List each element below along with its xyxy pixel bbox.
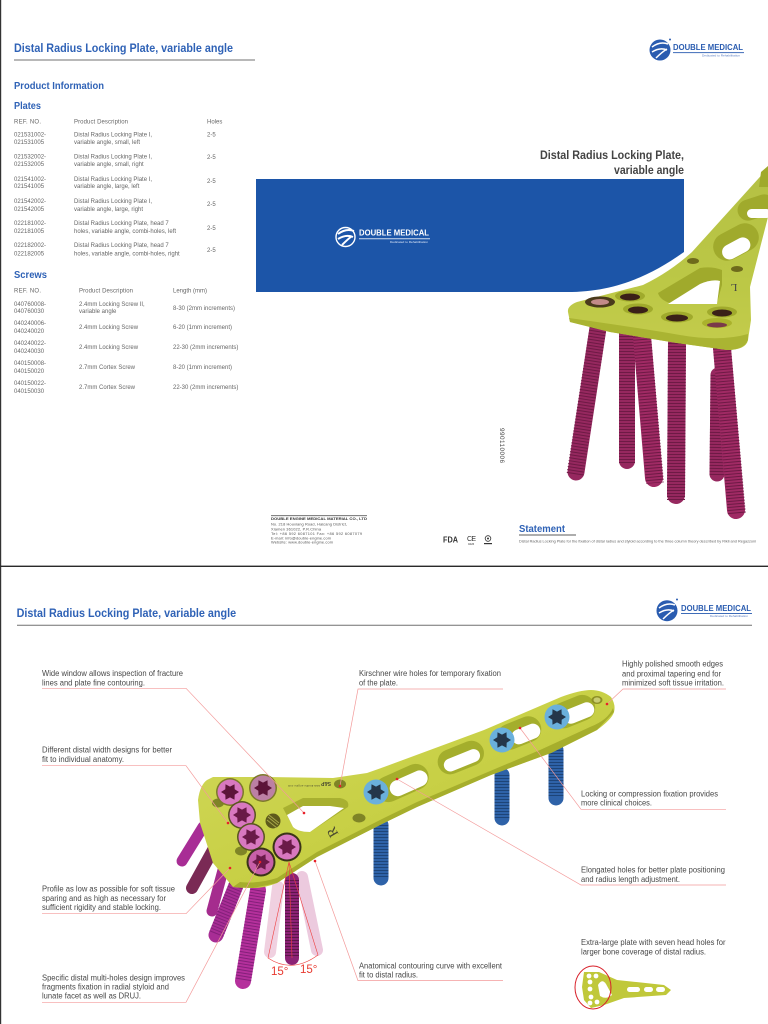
logo: page 2: DOUBLE MEDICAL [681, 603, 751, 613]
callout: locking or compression [519, 727, 726, 809]
table: plates: holes, variable angle, combi-holes, left [74, 229, 176, 235]
table: plates: 021541005 [14, 184, 45, 190]
table: screws: 2.4mm Locking Screw [79, 325, 139, 331]
certification marks: CE [467, 536, 476, 543]
callout: polished edges: and proximal tapering end for [622, 669, 721, 678]
company address block: DOUBLE ENGINE MEDICAL MATERIAL CO., LTD [271, 516, 367, 521]
table: plates: 2-5 [207, 179, 216, 185]
table: screws: 040240022- [14, 341, 46, 347]
table: plates: variable angle, small, right [74, 162, 144, 168]
plate holes: cover: L [730, 281, 737, 293]
plate engraving: S&P [320, 780, 331, 786]
logo: page 2 [656, 598, 752, 621]
angle markers: 15 degrees [268, 862, 318, 978]
callout: multi-holes design [42, 861, 261, 1002]
logo: cover white [336, 228, 430, 246]
plate body [198, 690, 615, 888]
table: screws: 040150008- [14, 361, 46, 367]
product code: vertical: 990110006 [498, 428, 505, 463]
table: screws: Product Description [79, 289, 133, 295]
callout: wide window [42, 669, 305, 814]
screws: faded angle positions [270, 877, 317, 952]
plate engraving: www.double-engine.com [288, 784, 320, 787]
table: plates: holes, variable angle, combi-holes, right [74, 252, 180, 258]
heading: plates: Plates [14, 101, 41, 112]
statement: Statement [519, 524, 566, 535]
cover heading: Distal Radius Locking Plate, [540, 148, 684, 162]
table: screws: 2.7mm Cortex Screw [79, 365, 136, 371]
table: screws: Length (mm) [173, 289, 207, 295]
table: screws: 8-30 (2mm increments) [173, 306, 235, 312]
table: screws: 040760030 [14, 309, 45, 315]
table: screws: 2.4mm Locking Screw [79, 345, 139, 351]
table: screws: 2.7mm Cortex Screw [79, 385, 136, 391]
heading: screws: Screws [14, 270, 47, 281]
table: screws: 040240020 [14, 329, 45, 335]
table: plates: 021542002- [14, 199, 46, 205]
table: plates: Distal Radius Locking Plate, head 7 [74, 221, 169, 227]
plate holes [212, 691, 602, 856]
callout: anatomical contouring: fit to distal radius. [359, 970, 418, 979]
screws: cover [575, 328, 737, 515]
logo: page 1 top [650, 38, 744, 60]
angle markers: 15 degrees: 15° [300, 964, 317, 976]
certification marks [443, 535, 492, 546]
logo: cover white: DOUBLE MEDICAL [359, 228, 429, 238]
statement [519, 524, 756, 543]
screws: pink [182, 827, 292, 981]
certification marks: FDA [443, 535, 458, 544]
logo: cover white: Dedicated to Rehabilitation [390, 240, 428, 244]
callout: anatomical contouring: Anatomical contouring curve with excellent [359, 961, 503, 970]
table: plates: 022181002- [14, 221, 46, 227]
callout: kirschner wire holes [339, 669, 503, 787]
callout: wide window: lines and plate fine contouring. [42, 678, 145, 687]
table: screws: 040240030 [14, 349, 45, 355]
cover heading: variable angle [614, 163, 684, 177]
callout: elongated holes: Elongated holes for better plate positioning [581, 866, 725, 875]
callout: multi-holes design: Specific distal multi-holes design improves [42, 973, 185, 982]
callout: kirschner wire holes: Kirschner wire holes for temporary fixation [359, 669, 501, 678]
screws: blue [381, 750, 556, 878]
callout: polished edges: minimized soft tissue irritation. [622, 679, 724, 688]
plate engraving: R [324, 823, 342, 840]
table: plates: 021531002- [14, 132, 46, 138]
callout: locking or compression: Locking or compression fixation provides [581, 789, 718, 798]
callout: low profile: sufficient rigidity and stable locking. [42, 903, 161, 912]
table: screws: 040150020 [14, 369, 45, 375]
illustration: annotated plate with screws [182, 690, 615, 981]
table: screws: 040150022- [14, 381, 46, 387]
callout: wide window: Wide window allows inspection of fracture [42, 669, 184, 678]
table: screws: 8-20 (1mm increment) [173, 365, 232, 371]
table: plates: 022181005 [14, 229, 45, 235]
callout: extra-large plate: Extra-large plate with seven head holes for [581, 938, 726, 947]
callout: distal width [42, 746, 229, 824]
table: plates: Holes [207, 120, 222, 126]
callout: anatomical contouring [314, 860, 503, 981]
company address block: Tel: +86 592 6087101 Fax: +86 592 6087079 [271, 531, 362, 536]
company address block: No. 218 Houxiang Road, Haicang District, [271, 522, 347, 527]
table: screws: REF. NO. [14, 289, 41, 295]
table: plates: 2-5 [207, 248, 216, 254]
heading: product information: Product Information [14, 81, 104, 92]
company address block: Xiamen 361022, P.R.China [271, 526, 322, 531]
table: plates: Distal Radius Locking Plate I, [74, 132, 152, 138]
callout: polished edges: Highly polished smooth edges [622, 659, 723, 668]
company address block: E-mail: info@double-engine.com [271, 535, 331, 540]
table: screws: 22-30 (2mm increments) [173, 345, 238, 351]
table: plates: 021532005 [14, 162, 45, 168]
table: screws: variable angle [79, 309, 117, 315]
cover heading [540, 148, 684, 177]
table: screws: 040760008- [14, 302, 46, 308]
table: plates: 2-5 [207, 202, 216, 208]
table: plates: Distal Radius Locking Plate I, [74, 177, 152, 183]
callout: locking or compression: more clinical choices. [581, 798, 652, 807]
table: plates: 2-5 [207, 132, 216, 138]
callout: extra-large plate: larger bone coverage of distal radius. [581, 947, 706, 956]
certification marks: 0426 [468, 542, 475, 546]
callout: multi-holes design: lunate facet as well as DRUJ. [42, 991, 141, 1000]
logo: page 1 top: Dedicated to Rehabilitation [702, 54, 740, 58]
table: plates: 2-5 [207, 226, 216, 232]
callout: kirschner wire holes: of the plate. [359, 678, 398, 687]
plate window [283, 798, 348, 832]
table: plates: 021532002- [14, 155, 46, 161]
illustration: extra-large plate thumbnail [575, 966, 671, 1009]
callout: distal width: fit to individual anatomy. [42, 755, 124, 764]
table: plates: REF. NO. [14, 120, 41, 126]
table: screws: 22-30 (2mm increments) [173, 385, 238, 391]
callout: extra-large plate [581, 938, 726, 956]
table: plates: Distal Radius Locking Plate I, [74, 199, 152, 205]
screw heads: blue [364, 704, 570, 804]
table: screws: 040240006- [14, 321, 46, 327]
logo: page 2: Dedicated to Rehabilitation [710, 614, 748, 618]
title: page 2: Distal Radius Locking Plate, variable angle [17, 606, 236, 620]
callout: low profile: sparing and as high as necessary for [42, 894, 166, 903]
table: plates: 021541002- [14, 177, 46, 183]
title: page 1: Distal Radius Locking Plate, variable angle [14, 41, 233, 55]
screw heads: pink [216, 774, 302, 876]
table: plates: variable angle, large, right [74, 207, 143, 213]
statement: Distal Radius Locking Plate for the fixation of distal radius and styloid according to the three column theory described by Rikli and Regazzoni [519, 539, 756, 543]
table: plates: Distal Radius Locking Plate I, [74, 155, 152, 161]
callout: elongated holes [396, 778, 726, 885]
company address block [271, 515, 367, 545]
table: plates: Distal Radius Locking Plate, head 7 [74, 243, 169, 249]
table: plates: variable angle, small, left [74, 140, 140, 146]
table: screws [14, 289, 238, 395]
table: plates: 022182005 [14, 252, 45, 258]
callout: distal width: Different distal width designs for better [42, 746, 172, 755]
plate body: cover [568, 168, 768, 350]
plate engraving [288, 780, 342, 840]
table: plates: 021542005 [14, 207, 45, 213]
company address block: Website: www.double-engine.com [271, 540, 333, 545]
table: screws: 040150030 [14, 389, 45, 395]
table: screws: 6-20 (1mm increment) [173, 325, 232, 331]
table: plates [14, 120, 222, 258]
logo: page 1 top: DOUBLE MEDICAL [673, 42, 743, 52]
plate holes: cover [585, 166, 768, 328]
callout: elongated holes: and radius length adjustment. [581, 875, 680, 884]
table: screws: 2.4mm Locking Screw II, [79, 302, 145, 308]
illustration: cover plate with screws [568, 166, 768, 515]
table: plates: 021531005 [14, 140, 45, 146]
callout: multi-holes design: fragments fixation in radial styloid and [42, 982, 169, 991]
angle markers: 15 degrees: 15° [271, 966, 288, 978]
callout: low profile: Profile as low as possible for soft tissue [42, 885, 176, 894]
callout: low profile [42, 867, 231, 914]
table: plates: Product Description [74, 120, 128, 126]
table: plates: 2-5 [207, 155, 216, 161]
table: plates: 022182002- [14, 243, 46, 249]
panel: blue cover band [256, 179, 684, 292]
callout: polished edges [606, 659, 726, 705]
table: plates: variable angle, large, left [74, 184, 140, 190]
